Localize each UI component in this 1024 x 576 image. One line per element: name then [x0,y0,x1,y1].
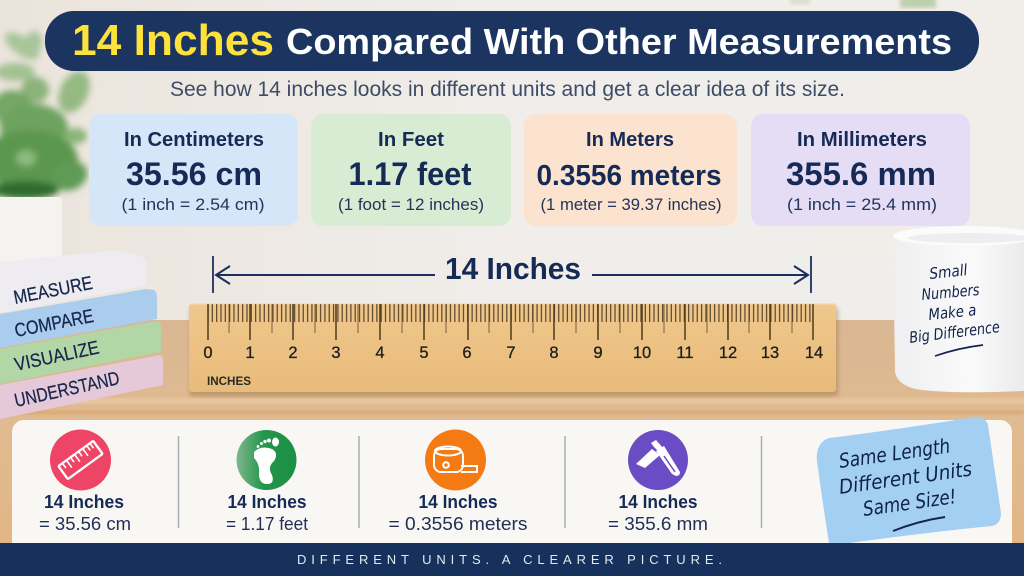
book: understand: UNDERSTAND [13,368,122,412]
plant in white pot [0,27,96,263]
ruler numbers: 11 [676,344,694,362]
icon: caliper [628,430,688,490]
ruler numbers: 2 [288,344,298,362]
ruler numbers: 8 [549,344,559,362]
summary: meters: = 0.3556 meters [388,514,528,534]
sticky note callout: Same Size! [861,484,958,521]
summary: feet: 14 Inches [228,492,306,512]
book: visualize [0,321,161,384]
summary: meters [388,430,528,534]
ruler numbers: 4 [375,344,385,362]
book: understand [0,355,163,419]
icon: tape measure [425,430,486,490]
dimension arrow: 14 inches [213,251,811,293]
card: millimeters [751,114,970,226]
mug slogan: Big Difference [908,318,1001,347]
mug slogan: Make a [928,301,977,324]
summary: millimeters: 14 Inches [618,492,698,512]
ruler numbers: 1 [245,344,255,362]
title banner: Compared With Other Measurements [286,21,952,62]
card: feet [311,114,511,226]
card: meters: (1 meter = 39.37 inches) [540,195,722,214]
ruler numbers: 6 [462,344,472,362]
icon: footprint [236,430,296,490]
subtitle: See how 14 inches looks in different units and get a clear idea of its size. [170,78,845,101]
footer bar: DIFFERENT UNITS. A CLEARER PICTURE. [297,552,722,567]
card: centimeters: 35.56 cm [126,156,262,192]
ruler numbers: 10 [633,344,651,362]
icon: ruler [50,430,111,490]
ruler numbers: 0 [203,344,213,362]
card: centimeters [89,114,298,226]
card: feet: In Feet [378,129,444,151]
sticky note callout [817,417,1001,543]
ruler tick marks [208,304,813,340]
ruler numbers [203,344,823,362]
book: compare: COMPARE [13,306,95,342]
summary: meters: 14 Inches [418,492,498,512]
summary: feet: = 1.17 feet [226,514,308,534]
card: meters: 0.3556 meters [536,160,722,192]
card: feet: (1 foot = 12 inches) [338,195,484,214]
book: measure [0,250,146,313]
mug slogan: Numbers [921,281,980,304]
book: compare [0,289,157,348]
sticky note callout: Same Length [837,434,952,473]
ruler numbers: 14 [805,344,823,362]
card: meters: In Meters [586,129,674,151]
card: centimeters: (1 inch = 2.54 cm) [122,195,264,214]
card: millimeters: (1 inch = 25.4 mm) [787,195,937,214]
book: visualize: VISUALIZE [13,337,101,376]
summary: feet [226,430,308,534]
summary: centimeters: 14 Inches [44,492,124,512]
title banner: 14 Inches [72,16,274,65]
sticky note callout: Different Units [837,457,973,499]
card: millimeters: In Millimeters [797,129,927,151]
ruler numbers: 7 [506,344,516,362]
mug slogan [908,261,1001,356]
card: centimeters: In Centimeters [124,129,264,151]
footer bar [0,543,1024,576]
mug slogan: Small [929,261,969,283]
dimension arrow: 14 inches: 14 Inches [445,251,581,286]
ruler numbers: 9 [593,344,603,362]
stack of books [0,250,163,419]
ruler numbers: 12 [719,344,737,362]
card: feet: 1.17 feet [348,156,472,192]
book: measure: MEASURE [12,273,94,309]
bottom summary panel [12,420,1012,555]
ruler numbers: 5 [419,344,429,362]
summary: centimeters [39,430,131,534]
title banner [45,11,979,71]
ruler numbers: 3 [331,344,341,362]
ruler unit label: INCHES [207,374,251,388]
card: millimeters: 355.6 mm [786,156,936,192]
coffee mug [893,226,1024,392]
ruler numbers: 13 [761,344,779,362]
summary: centimeters: = 35.56 cm [39,514,131,534]
card: meters [524,114,737,226]
summary: millimeters: = 355.6 mm [608,514,708,534]
summary: millimeters [608,430,708,534]
wooden ruler [189,303,838,396]
